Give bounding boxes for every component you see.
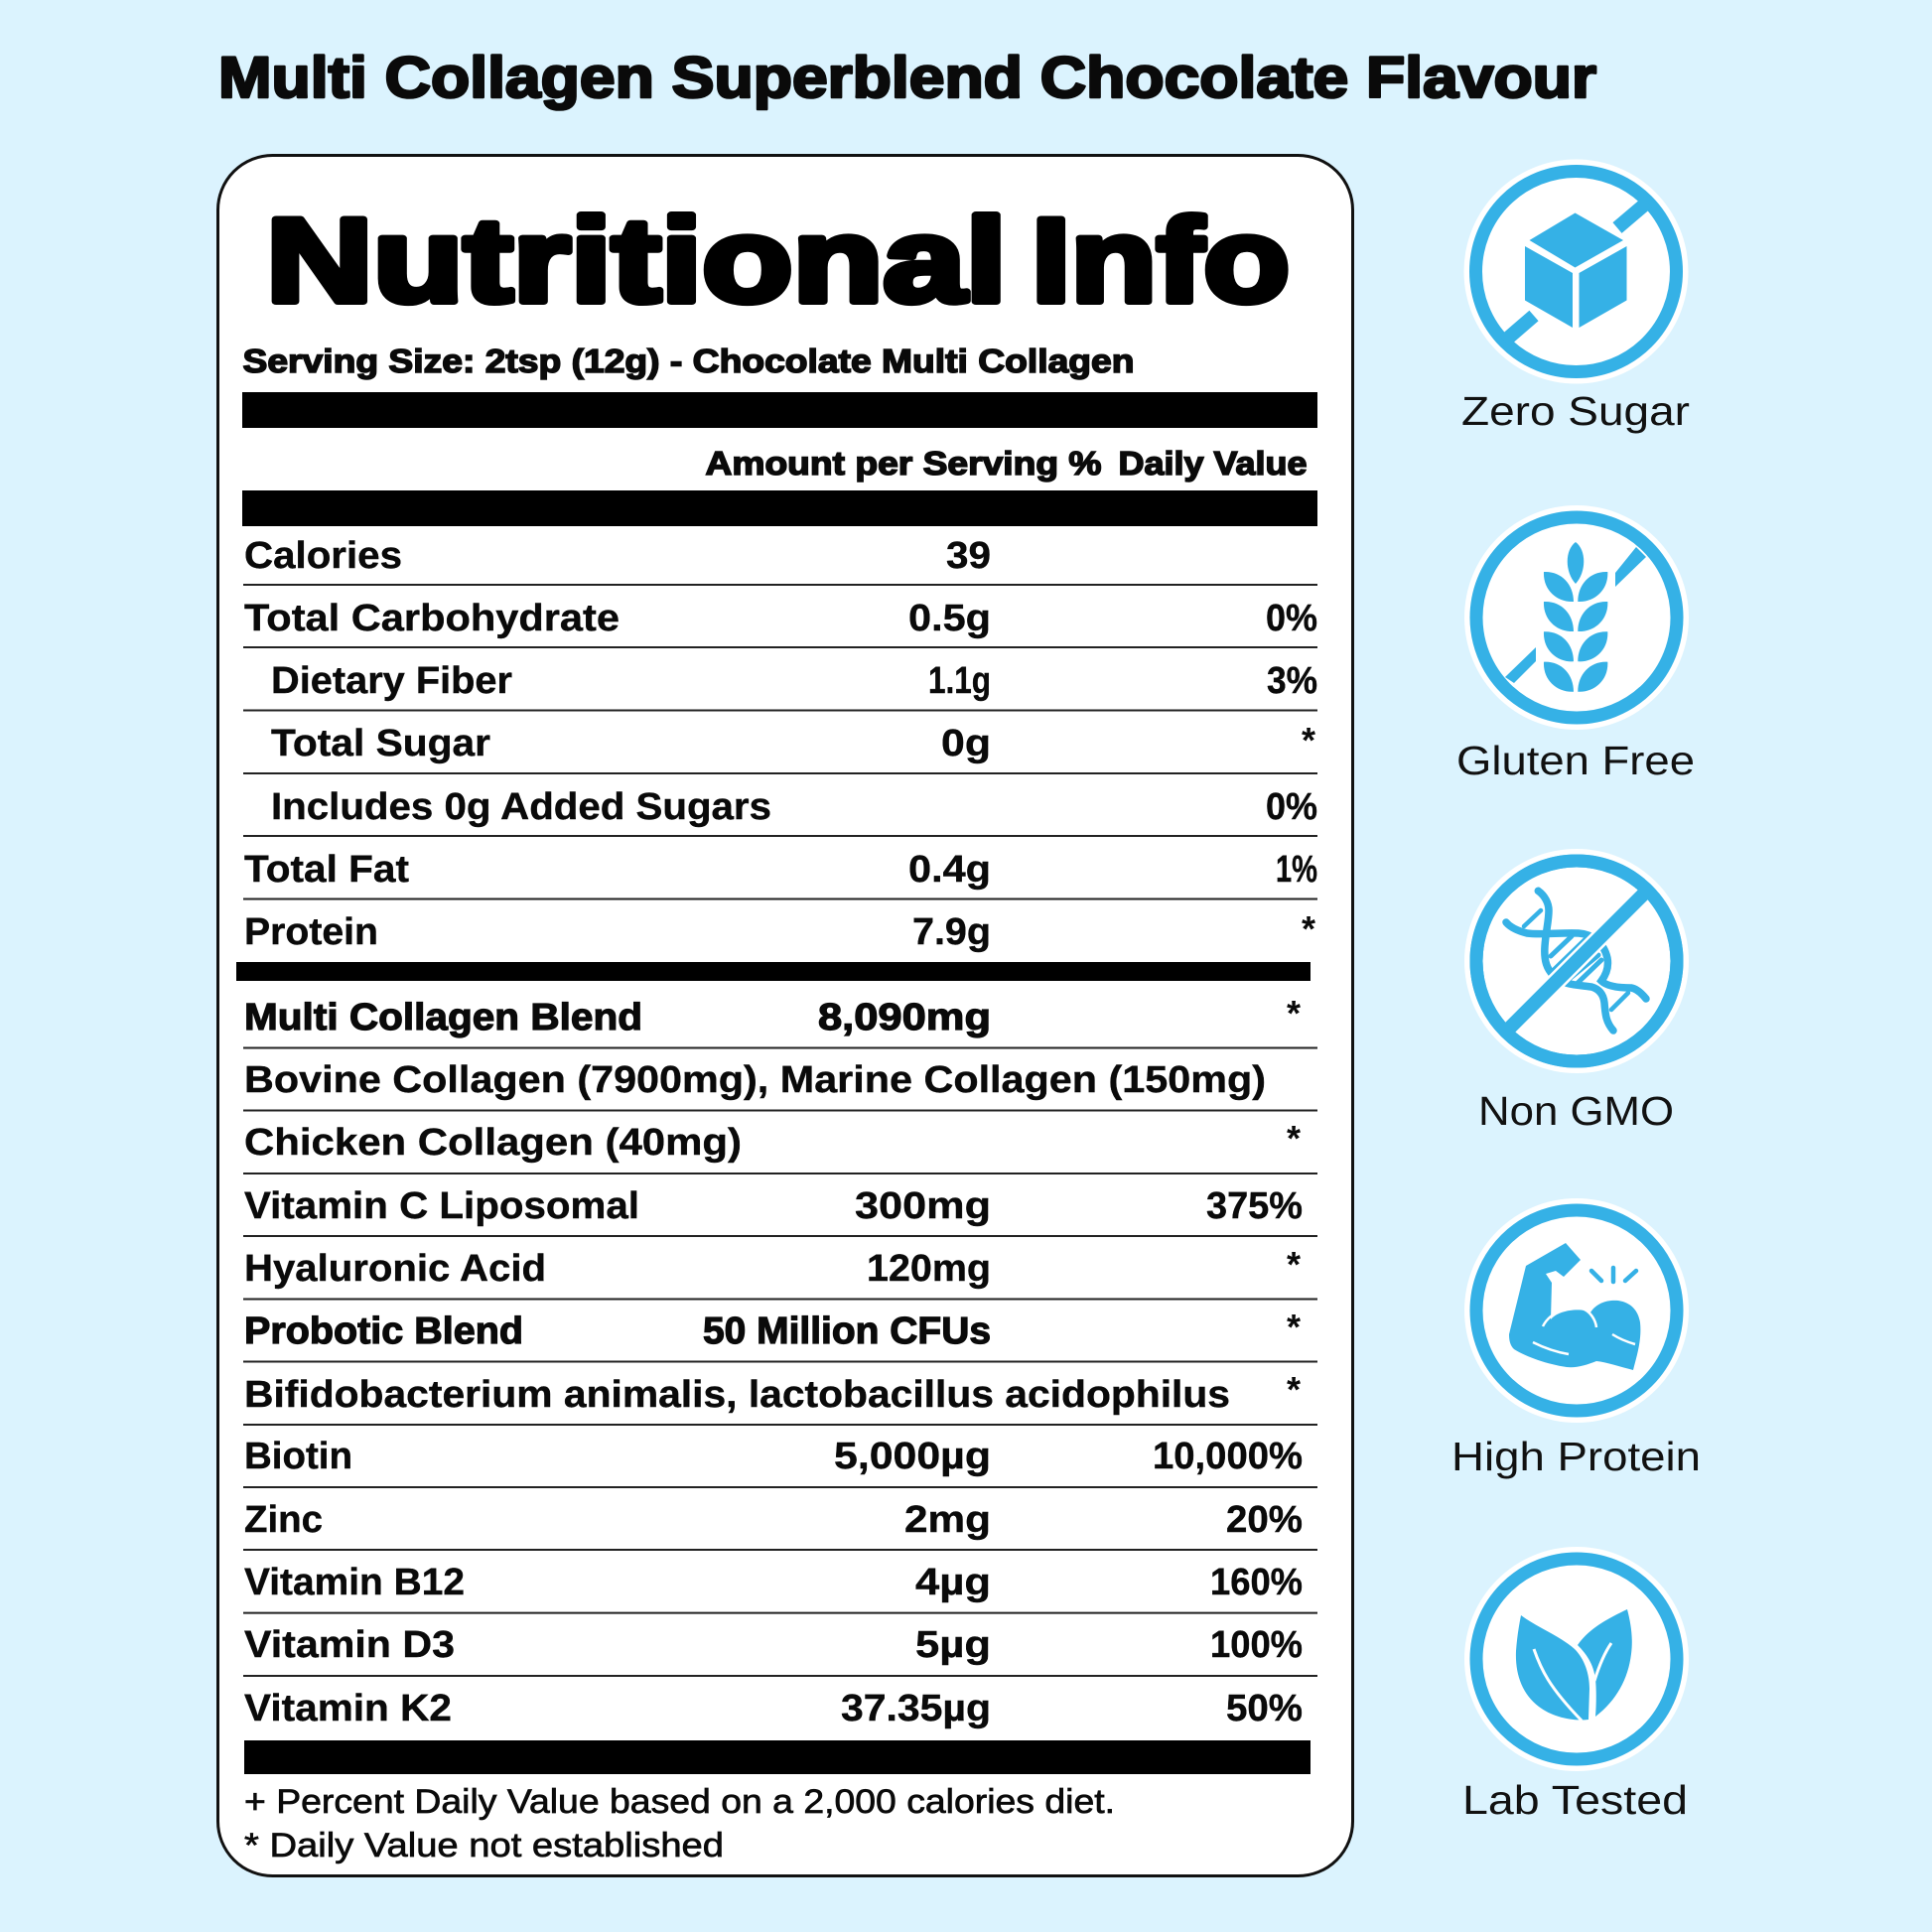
- footnote: percent daily value: + Percent Daily Value based on a 2,000 calories diet.: [244, 1783, 1115, 1821]
- column headers: Daily Value: [1118, 445, 1307, 482]
- row: Bovine and Marine Collagen: Bovine Collagen (7900mg), Marine Collagen (150mg): [244, 1059, 1266, 1101]
- row: Chicken Collagen: [244, 1118, 1301, 1164]
- row: Probotic Blend: 50 Million CFUs: [703, 1311, 991, 1352]
- row: Total Sugar: 0g: [941, 723, 991, 764]
- row: Hyaluronic Acid: 120mg: [867, 1248, 991, 1290]
- row: Vitamin D3: [244, 1624, 1303, 1666]
- row: Bifidobacterium: Bifidobacterium animalis, lactobacillus acidophilus: [244, 1374, 1230, 1416]
- row: Multi Collagen Blend: *: [1287, 993, 1301, 1034]
- row: Zinc: Zinc: [244, 1499, 323, 1541]
- panel: nutrition label: [218, 155, 1352, 1876]
- icon: zero sugar: [1463, 159, 1688, 383]
- row: Added Sugars: [271, 786, 1317, 828]
- row: Hyaluronic Acid: Hyaluronic Acid: [244, 1248, 546, 1290]
- row: Vitamin B12: Vitamin B12: [244, 1562, 465, 1603]
- row: Total Sugar: Total Sugar: [271, 723, 490, 764]
- row: Biotin: [244, 1436, 1303, 1477]
- label: Zero Sugar: Zero Sugar: [1461, 388, 1690, 434]
- icon: non GMO: [1464, 849, 1689, 1073]
- row: Dietary Fiber: 1.1g: [928, 660, 991, 702]
- row: Total Fat: [244, 849, 1317, 891]
- row: Protein: 7.9g: [912, 911, 991, 953]
- row: Total Carbohydrate: 0%: [1266, 598, 1317, 639]
- row: Vitamin B12: 4µg: [915, 1562, 991, 1603]
- row: Vitamin C Liposomal: 375%: [1206, 1185, 1303, 1227]
- row: Hyaluronic Acid: [244, 1244, 1301, 1290]
- row: Total Sugar: [271, 720, 1315, 764]
- label: Non GMO: Non GMO: [1478, 1088, 1674, 1134]
- row: Total Fat: 0.4g: [908, 849, 991, 891]
- row: Total Sugar: *: [1302, 720, 1315, 760]
- row: Biotin: 10,000%: [1153, 1436, 1303, 1477]
- footnote: daily value not established: * Daily Value not established: [244, 1827, 724, 1864]
- row: Vitamin C Liposomal: 300mg: [855, 1185, 991, 1227]
- row: Protein: [244, 908, 1315, 953]
- row: Hyaluronic Acid: *: [1287, 1244, 1301, 1285]
- row: Calories: Calories: [244, 535, 402, 577]
- row: Multi Collagen Blend: 8,090mg: [818, 997, 991, 1038]
- icon: gluten free: [1464, 505, 1689, 730]
- row: Dietary Fiber: Dietary Fiber: [271, 660, 512, 702]
- row: Dietary Fiber: 3%: [1267, 660, 1317, 702]
- row: Vitamin C Liposomal: [244, 1185, 1303, 1227]
- row: Multi Collagen Blend: Multi Collagen Blend: [244, 997, 642, 1038]
- heading: Nutritional Info: Info: [1032, 195, 1290, 328]
- row: Dietary Fiber: [271, 660, 1317, 702]
- top black bar: [242, 392, 1317, 428]
- row: Vitamin B12: 160%: [1210, 1562, 1303, 1603]
- title: Multi Collagen Superblend Chocolate Flavour: [218, 46, 1596, 110]
- row: Added Sugars: 0%: [1266, 786, 1317, 828]
- row: Probotic Blend: *: [1287, 1307, 1301, 1347]
- row: Zinc: 20%: [1226, 1499, 1303, 1541]
- row: Vitamin K2: Vitamin K2: [244, 1688, 452, 1729]
- row: Multi Collagen Blend: [244, 993, 1301, 1038]
- header black bar: [242, 490, 1317, 526]
- row: Chicken Collagen: Chicken Collagen (40mg): [244, 1122, 742, 1164]
- row: Total Carbohydrate: Total Carbohydrate: [244, 598, 620, 639]
- row: Protein: *: [1302, 908, 1315, 949]
- row: Vitamin K2: [244, 1688, 1303, 1729]
- row: Vitamin D3: 100%: [1210, 1624, 1303, 1666]
- heading: Nutritional Info: Nutritional: [266, 195, 1007, 328]
- icon: lab tested: [1464, 1547, 1689, 1771]
- row: Zinc: 2mg: [904, 1499, 991, 1541]
- row: Protein: Protein: [244, 911, 378, 953]
- row: Vitamin K2: 50%: [1226, 1688, 1303, 1729]
- row: Vitamin C Liposomal: Vitamin C Liposomal: [244, 1185, 639, 1227]
- label: Gluten Free: Gluten Free: [1456, 738, 1695, 783]
- panel background: [218, 155, 1352, 1876]
- label: Lab Tested: Lab Tested: [1462, 1777, 1688, 1823]
- row: Probotic Blend: [244, 1307, 1301, 1352]
- row: Vitamin B12: [244, 1562, 1303, 1603]
- row: Calories: [244, 535, 991, 577]
- row: Total Fat: 1%: [1276, 849, 1317, 891]
- row: Bifidobacterium: *: [1287, 1369, 1301, 1410]
- row: Total Carbohydrate: 0.5g: [908, 598, 991, 639]
- middle black bar: [236, 962, 1311, 981]
- heading: Nutritional Info: [266, 195, 1290, 328]
- row: Total Carbohydrate: [244, 598, 1317, 639]
- bottom black bar: [244, 1740, 1311, 1774]
- column headers: [705, 445, 1307, 482]
- row: Biotin: Biotin: [244, 1436, 352, 1477]
- row: Added Sugars: Includes 0g Added Sugars: [271, 786, 771, 828]
- row: Total Fat: Total Fat: [244, 849, 409, 891]
- row: Calories: 39: [946, 535, 991, 577]
- serving size: Serving Size: 2tsp (12g) - Chocolate Multi Collagen: [242, 343, 1134, 379]
- label: High Protein: High Protein: [1451, 1434, 1701, 1479]
- row: Vitamin D3: 5µg: [915, 1624, 991, 1666]
- icon: high protein: [1464, 1198, 1689, 1423]
- row: Zinc: [244, 1499, 1303, 1541]
- row: Chicken Collagen: *: [1287, 1118, 1301, 1159]
- column headers: Amount per Serving %: [705, 445, 1102, 482]
- row: Biotin: 5,000µg: [834, 1436, 991, 1477]
- row: Vitamin K2: 37.35µg: [841, 1688, 991, 1729]
- row: Vitamin D3: Vitamin D3: [244, 1624, 455, 1666]
- row: Probotic Blend: Probotic Blend: [244, 1311, 523, 1352]
